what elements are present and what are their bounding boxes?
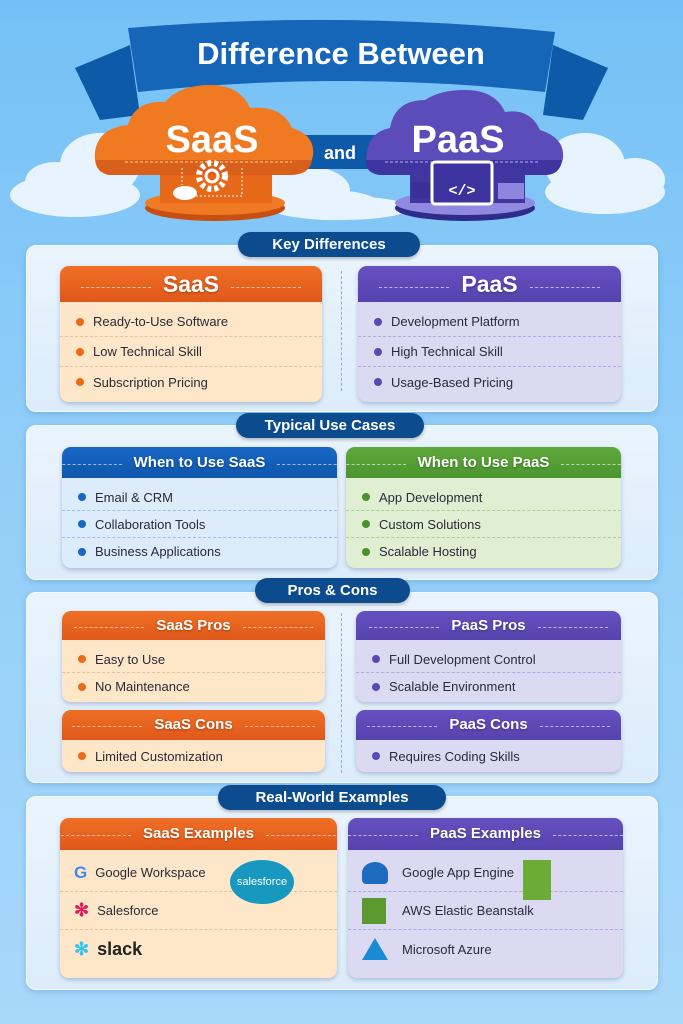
card: SaaS pros: Easy to Use: [95, 652, 165, 666]
example: Microsoft Azure: [362, 938, 492, 960]
card: SaaS examples: SaaS Examples: [143, 825, 254, 842]
card: SaaS key: Ready-to-Use Software: [93, 314, 228, 329]
heading: Typical Use Cases: [236, 413, 424, 438]
and connector: [300, 135, 380, 169]
card: when to use PaaS: App Development: [379, 490, 482, 504]
card: PaaS key: [358, 266, 621, 402]
example: Google App Engine: Google App Engine: [402, 865, 514, 880]
card: when to use PaaS: Custom Solutions: [379, 516, 481, 532]
heading: Key Differences: Key Differences: [272, 236, 386, 253]
card: PaaS pros: PaaS Pros: [451, 617, 526, 634]
card: PaaS key: Usage-Based Pricing: [391, 374, 513, 390]
card: PaaS cons: [356, 710, 621, 772]
and connector: and: [324, 143, 356, 163]
panel: pros & cons: [26, 592, 658, 783]
card: SaaS cons: Limited Customization: [95, 748, 223, 764]
card: SaaS key: SaaS: [163, 271, 219, 297]
SaaS cloud: [95, 85, 313, 221]
panel: use cases: [26, 425, 658, 580]
example: Google Workspace: Google Workspace: [95, 865, 206, 880]
title ribbon: [75, 20, 608, 120]
card: PaaS key: Development Platform: [391, 314, 520, 329]
card: PaaS cons: Requires Coding Skills: [389, 748, 520, 764]
PaaS cloud: [366, 90, 563, 221]
title: Difference Between: [197, 36, 485, 71]
card: PaaS pros: Full Development Control: [389, 652, 536, 666]
example: Google Workspace: G: [74, 862, 87, 882]
heading: Real-World Examples: [218, 785, 446, 810]
icon: salesforce cloud: salesforce: [237, 876, 287, 888]
SaaS cloud: SaaS: [166, 119, 258, 161]
example: Salesforce: [60, 892, 337, 930]
card: PaaS examples: [348, 818, 623, 978]
card: when to use PaaS: [346, 447, 621, 568]
card: PaaS key: High Technical Skill: [391, 344, 503, 359]
card: SaaS key: [60, 266, 322, 402]
card: PaaS pros: Scalable Environment: [389, 679, 515, 694]
card: SaaS key: Subscription Pricing: [93, 374, 208, 390]
background clouds: [10, 133, 665, 220]
heading: Real-World Examples: Real-World Examples: [255, 789, 409, 806]
card: when to use PaaS: When to Use PaaS: [418, 454, 549, 471]
PaaS cloud: </>: [448, 183, 476, 200]
card: SaaS cons: SaaS Cons: [154, 716, 233, 733]
example: Salesforce: Salesforce: [97, 903, 159, 918]
panel: key differences: [26, 245, 658, 412]
heading: Typical Use Cases: Typical Use Cases: [265, 417, 395, 434]
example: slack: slack: [97, 938, 142, 958]
card: SaaS pros: [62, 611, 325, 702]
example: AWS Elastic Beanstalk: AWS Elastic Beanstalk: [402, 903, 534, 918]
example: slack: [74, 938, 142, 958]
card: SaaS examples: [60, 818, 337, 978]
example: Salesforce: ✻: [74, 900, 89, 920]
example: Microsoft Azure: Microsoft Azure: [402, 942, 492, 956]
icon: beanstalk: [523, 860, 551, 900]
example: Google Workspace: [60, 854, 337, 892]
card: when to use SaaS: Email & CRM: [95, 490, 173, 504]
card: when to use PaaS: Scalable Hosting: [379, 544, 477, 559]
card: SaaS cons: [62, 710, 325, 772]
heading: Key Differences: [238, 232, 420, 257]
card: PaaS key: PaaS: [461, 271, 518, 297]
card: PaaS pros: [356, 611, 621, 702]
heading: Pros & Cons: Pros & Cons: [287, 582, 378, 599]
hero illustration: [10, 20, 665, 221]
card: PaaS examples: PaaS Examples: [430, 825, 541, 842]
card: SaaS key: Low Technical Skill: [93, 344, 202, 359]
example: Google App Engine: [348, 854, 623, 892]
card: when to use SaaS: Collaboration Tools: [95, 516, 205, 532]
card: SaaS pros: SaaS Pros: [156, 617, 231, 634]
icon: salesforce cloud: [230, 860, 294, 904]
card: PaaS cons: PaaS Cons: [449, 716, 528, 733]
heading: Pros & Cons: [255, 578, 410, 603]
card: when to use SaaS: When to Use SaaS: [134, 454, 265, 471]
example: slack: ✻: [74, 938, 89, 958]
card: SaaS pros: No Maintenance: [95, 679, 190, 694]
card: when to use SaaS: Business Applications: [95, 544, 221, 559]
PaaS cloud: PaaS: [412, 119, 504, 161]
card: when to use SaaS: [62, 447, 337, 568]
example: AWS Elastic Beanstalk: [348, 892, 623, 930]
panel: examples: [26, 796, 658, 990]
